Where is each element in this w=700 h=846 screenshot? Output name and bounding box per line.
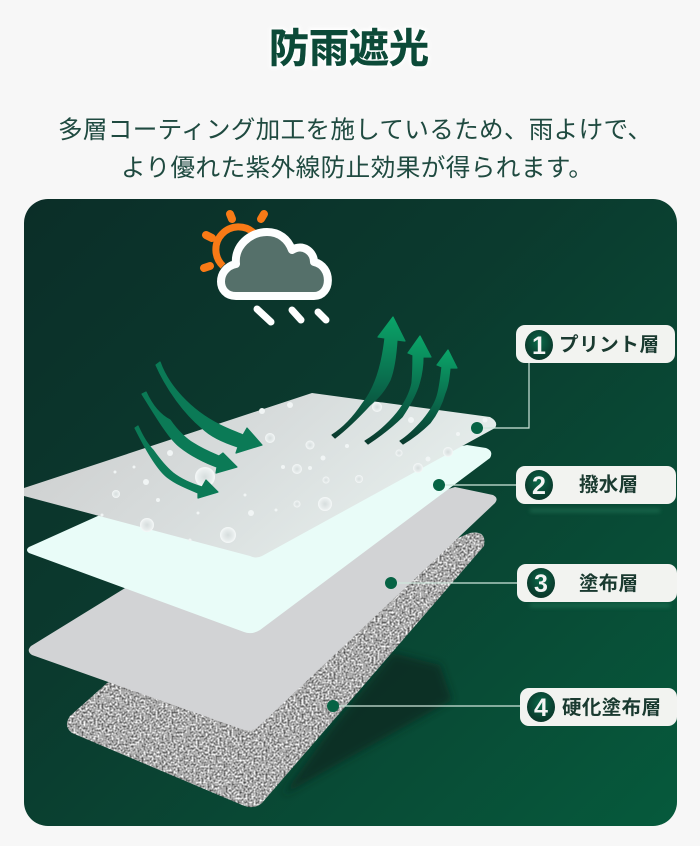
rain drops (257, 309, 326, 322)
arrows: rain hitting the surface (135, 362, 262, 498)
shadow under bottom layer (283, 653, 452, 795)
sun (204, 214, 264, 268)
label 4: hardened coating layer (520, 688, 677, 726)
layer 4: hardened coating (67, 533, 484, 807)
description text: 多層コーティング加工を施しているため、雨よけで、 (58, 116, 652, 144)
description text: より優れた紫外線防止効果が得られます。 (121, 154, 593, 182)
label 3: coating layer (517, 564, 677, 602)
icon: sun and rain cloud (204, 214, 328, 322)
label 3: coating layer: 塗布層 (579, 573, 638, 595)
panel: layer diagram (24, 199, 677, 826)
label 2: water repellent layer: 2 (532, 472, 546, 500)
title: 防雨遮光 (269, 27, 429, 71)
water droplets (100, 402, 488, 543)
title: 防雨遮光 (269, 27, 429, 71)
arrows: vapour rising (332, 317, 457, 444)
label 1: print layer: プリント層 (559, 334, 659, 356)
label 3: coating layer: 3 (534, 570, 548, 598)
label 2: water repellent layer: 撥水層 (579, 474, 638, 496)
connector lines (333, 362, 529, 706)
description text (58, 116, 652, 182)
layer 1: print layer (24, 393, 496, 558)
label 2: water repellent layer (516, 466, 676, 504)
layer 2: water repellent (27, 445, 491, 633)
layer marker dots (327, 422, 483, 712)
label 1: print layer: 1 (532, 332, 546, 360)
label 4: hardened coating layer: 硬化塗布層 (562, 697, 661, 719)
label glows (530, 509, 670, 607)
layer 3: coating (29, 487, 497, 731)
label 1: print layer (516, 325, 675, 363)
cloud (221, 232, 328, 296)
label 4: hardened coating layer: 4 (534, 694, 548, 722)
